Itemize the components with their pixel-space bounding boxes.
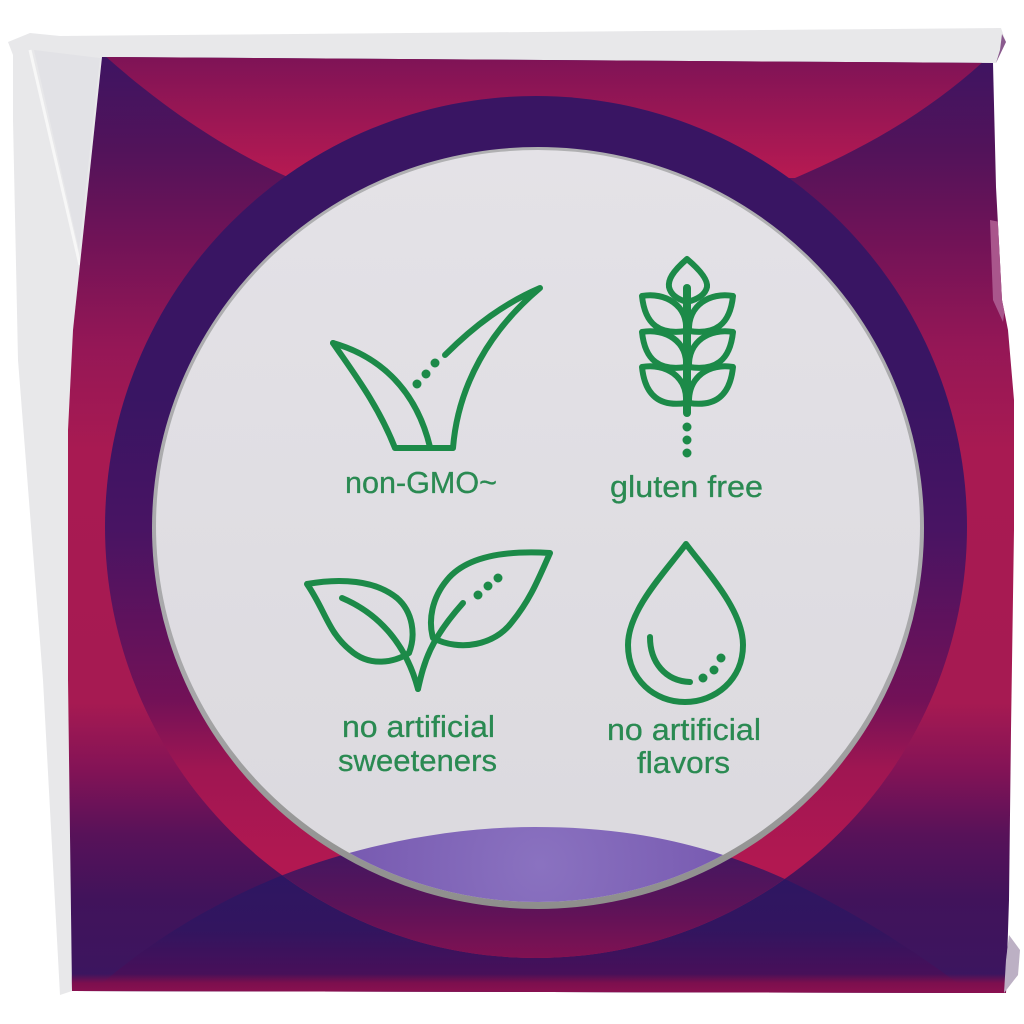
icon: two leaves [307, 552, 550, 689]
icon: non-GMO check leaf [333, 288, 540, 448]
lavender crescent [350, 827, 723, 902]
label: no artificial flavors: no artificial [607, 712, 761, 747]
label: non-GMO: non-GMO~ [345, 465, 497, 500]
white disc [156, 150, 920, 902]
label: no artificial flavors: flavors [637, 745, 730, 780]
icon: water drop [628, 544, 743, 702]
rubbed patch on right edge [990, 220, 1006, 322]
label: no artificial flavors [607, 712, 761, 780]
label: no artificial sweeteners: no artificial [342, 709, 495, 744]
top magenta wedge [104, 55, 985, 178]
purple ring [105, 96, 967, 958]
label: no artificial sweeteners [338, 709, 497, 778]
label: no artificial sweeteners: sweeteners [338, 743, 497, 778]
bottom right crumpled corner [1004, 935, 1020, 993]
silver disc edge [152, 147, 924, 909]
icon: wheat [642, 259, 733, 456]
bottom blue wedge [84, 876, 958, 993]
label: gluten free: gluten free [610, 469, 763, 504]
bottom crimson edge strip [72, 975, 1006, 993]
